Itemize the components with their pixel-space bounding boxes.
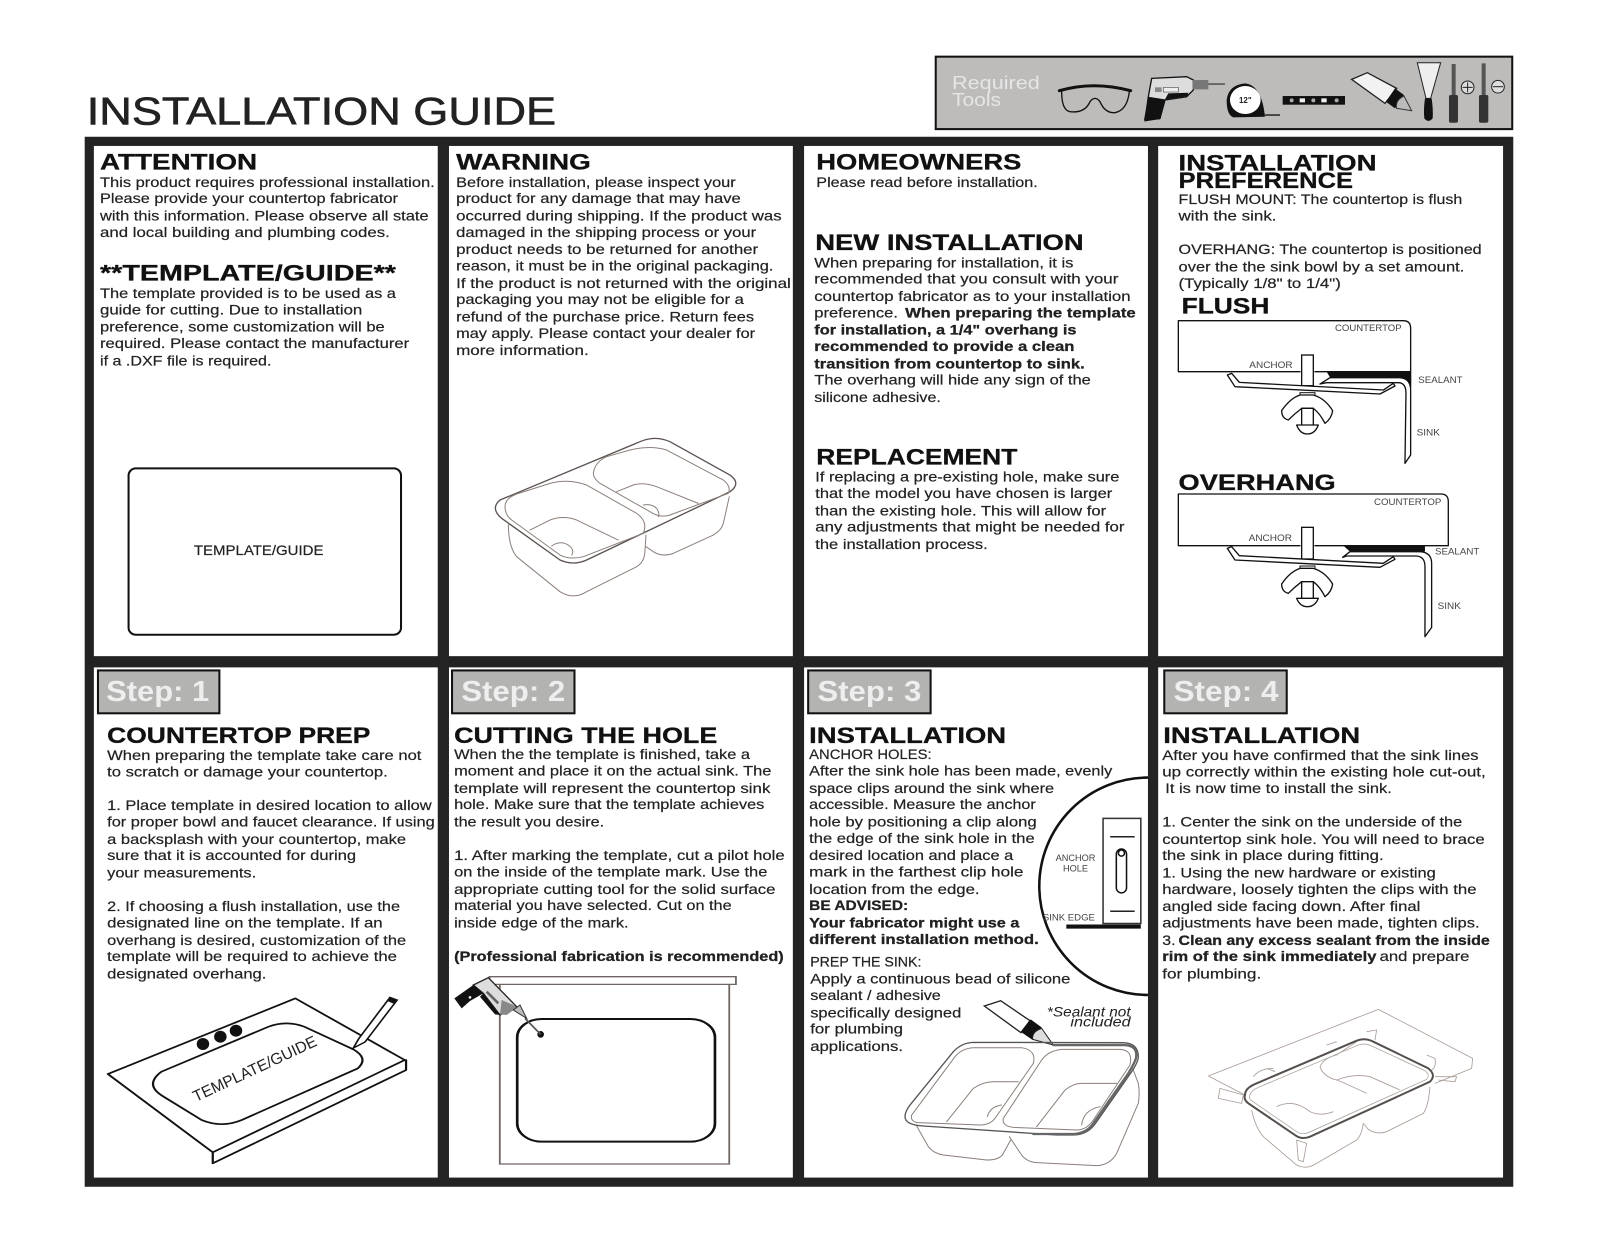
text: step 4 body: angled side facing down. After final (1162, 899, 1420, 915)
text: step 1 body: template will be required to achieve the (107, 949, 397, 965)
text: new installation body: preference. (814, 305, 898, 321)
text: warning body: refund of the purchase price. Return fees (456, 309, 754, 325)
text: anchor holes: Your fabricator might use a (809, 916, 1021, 932)
text: step 4 body: rim of the sink immediately (1162, 949, 1377, 965)
outer frame (85, 137, 1513, 1187)
text: warning body: product for any damage that may have (456, 191, 741, 207)
text: warning body: damaged in the shipping process or your (456, 225, 756, 241)
text: warning body: occurred during shipping. If the product was (456, 208, 782, 224)
icon: phillips screwdriver (1449, 64, 1474, 123)
heading: installation preference: PREFERENCE (1179, 168, 1353, 193)
diagram: overhang mount: SEALANT (1435, 546, 1480, 556)
text: prep the sink: specifically designed (810, 1005, 961, 1021)
diagram: overhang mount: ANCHOR (1249, 533, 1293, 543)
text: warning body: more information. (456, 343, 589, 359)
text: anchor holes: different installation method. (809, 932, 1039, 948)
detail: anchor hole circle: HOLE (1063, 863, 1088, 873)
diagram: flush mount: ANCHOR (1249, 360, 1293, 370)
detail: anchor hole circle: SINK EDGE (1043, 912, 1095, 922)
heading: replacement: REPLACEMENT (816, 444, 1018, 469)
text: new installation body: countertop fabricator as to your installation (814, 289, 1131, 305)
panel: attention (94, 146, 438, 656)
text: anchor holes: mark in the farthest clip hole (809, 865, 1024, 881)
text: attention body: and local building and plumbing codes. (100, 225, 390, 241)
illustration: double bowl sink (495, 438, 736, 596)
icon: drill (1144, 77, 1225, 121)
text: new installation body: When preparing for installation, it is (814, 255, 1073, 271)
illustration: sink with sealant tube (905, 1001, 1139, 1166)
text: step 4 body: countertop sink hole. You will need to brace (1162, 832, 1485, 848)
heading: warning: WARNING (456, 149, 591, 174)
text: new installation body: silicone adhesive. (814, 390, 941, 406)
text: step 2 body: on the inside of the template mark. Use the (454, 865, 767, 881)
text: attention body: with this information. Please observe all state (99, 208, 429, 224)
text: step 2 body: template will represent the countertop sink (454, 781, 771, 797)
required tools panel: Required (952, 72, 1040, 93)
text: anchor holes (809, 747, 1113, 948)
icon: sealant tube (1352, 73, 1412, 111)
diagram: flush mount: COUNTERTOP (1335, 323, 1402, 333)
text: new installation body: for installation, a 1/4" overhang is (814, 323, 1077, 339)
diagram: flush mount (1178, 321, 1463, 463)
text: preference body: FLUSH MOUNT: The countertop is flush (1179, 192, 1462, 208)
text: step 4 body: adjustments have been made, tighten clips. (1162, 916, 1480, 932)
note: sealant not included: *Sealant not (1047, 1004, 1132, 1019)
text: warning body: Before installation, please inspect your (456, 175, 736, 191)
badge: step 3 (808, 670, 931, 713)
text: step 1 body: When preparing the template take care not (107, 748, 421, 764)
icon: putty knife (1417, 63, 1441, 121)
text: anchor holes: ANCHOR HOLES: (809, 747, 932, 763)
text: step 1 body: a backsplash with your countertop, make (107, 832, 406, 848)
text: template guide body (100, 286, 409, 369)
text: anchor holes: location from the edge. (809, 882, 980, 898)
text: step 2 body: hole. Make sure that the template achieves (454, 797, 764, 813)
badge: step 3: Step: 3 (817, 676, 921, 708)
text: anchor holes: After the sink hole has been made, evenly (809, 764, 1113, 780)
text: prep the sink: applications. (810, 1039, 903, 1055)
text: preference body: over the the sink bowl by a set amount. (1179, 259, 1464, 275)
text: preference body: with the sink. (1177, 208, 1277, 224)
panel: step 3 (804, 667, 1148, 1178)
diagram: flush mount: SINK (1417, 427, 1440, 437)
text: step 1 body: 1. Place template in desired location to allow (107, 798, 432, 814)
panel: step 2 (449, 667, 793, 1178)
text: step 4 body (1162, 748, 1490, 983)
template box: TEMPLATE/GUIDE (194, 543, 323, 559)
text: step 2 body: material you have selected. Cut on the (454, 898, 732, 914)
text: warning body: reason, it must be in the original packaging. (456, 258, 773, 274)
text: warning body (456, 175, 791, 359)
icon: tape measure: 12" (1239, 96, 1252, 105)
diagram: overhang mount: SINK (1438, 601, 1461, 611)
heading: cutting the hole: CUTTING THE HOLE (454, 723, 717, 748)
text: step 4 body: for plumbing. (1162, 967, 1261, 983)
text: prep the sink: Apply a continuous bead of silicone (810, 972, 1070, 988)
text: new installation body: recommended that you consult with your (814, 272, 1119, 288)
text: step 1 body: your measurements. (107, 866, 256, 882)
template box (129, 468, 401, 635)
text: new installation body: transition from countertop to sink. (814, 356, 1085, 372)
text: step 4 body: up correctly within the existing hole cut-out, (1162, 765, 1486, 781)
text: new installation body: The overhang will hide any sign of the (814, 373, 1091, 389)
panel: step 1 (94, 667, 438, 1178)
diagram: overhang mount (1178, 494, 1480, 637)
text: replacement body: that the model you have chosen is larger (815, 486, 1113, 502)
text: new installation body (814, 255, 1136, 406)
text: step 1 body: designated line on the template. If an (107, 916, 383, 932)
text: step 4 body: 1. Using the new hardware or existing (1162, 866, 1436, 882)
text: replacement body: any adjustments that might be needed for (815, 520, 1125, 536)
text: prep the sink (810, 954, 1070, 1055)
icon: safety goggles (1059, 86, 1131, 113)
heading: installation: INSTALLATION (809, 723, 1006, 748)
text: attention body (99, 175, 435, 241)
text: step 1 body: to scratch or damage your countertop. (107, 765, 388, 781)
panel: step 4 (1158, 667, 1503, 1178)
text: prep the sink: for plumbing (810, 1022, 903, 1038)
heading: installation: INSTALLATION (1163, 723, 1360, 748)
text: step 2 body (454, 747, 785, 965)
text: homeowners intro: Please read before installation. (816, 175, 1038, 191)
text: step 2 body: appropriate cutting tool for the solid surface (454, 882, 776, 898)
text: replacement body: If replacing a pre-existing hole, make sure (815, 470, 1119, 486)
badge: step 2 (452, 670, 574, 713)
illustration: sink mounted under countertop (1208, 1009, 1473, 1167)
text: step 2 body: moment and place it on the actual sink. The (454, 764, 772, 780)
text: preference body: OVERHANG: The countertop is positioned (1179, 242, 1482, 258)
heading: overhang: OVERHANG (1179, 470, 1336, 495)
text: step 1 body: overhang is desired, customization of the (107, 933, 406, 949)
heading: installation preference: INSTALLATION (1179, 150, 1377, 175)
heading: homeowners: HOMEOWNERS (816, 149, 1021, 174)
text: anchor holes: space clips around the sink where (809, 781, 1054, 797)
text: step 4 body: 1. Center the sink on the underside of the (1162, 815, 1462, 831)
text: warning body: product needs to be returned for another (456, 242, 758, 258)
text: new installation body: When preparing the template (905, 305, 1136, 321)
text: step 2 body: (Professional fabrication is recommended) (454, 949, 784, 965)
text: step 1 body: sure that it is accounted for during (107, 848, 356, 864)
illustration: template on countertop (108, 997, 406, 1163)
text: replacement body: than the existing hole. This will allow for (815, 503, 1106, 519)
text: template guide body: The template provided is to be used as a (100, 286, 396, 302)
illustration: template on countertop: TEMPLATE/GUIDE (190, 1033, 320, 1106)
heading: flush: FLUSH (1182, 293, 1269, 318)
panel: homeowners (804, 146, 1148, 656)
text: step 2 body: the result you desire. (454, 815, 604, 831)
text: step 2 body: 1. After marking the template, cut a pilot hole (454, 848, 785, 864)
diagram: flush mount: SEALANT (1418, 375, 1463, 385)
required tools panel (936, 57, 1512, 129)
text: step 4 body: It is now time to install the sink. (1165, 781, 1392, 797)
badge: step 1: Step: 1 (106, 676, 209, 708)
text: prep the sink: sealant / adhesive (810, 988, 941, 1004)
text: replacement body (815, 470, 1125, 553)
icon: flat screwdriver (1479, 63, 1504, 123)
text: step 1 body: designated overhang. (107, 967, 266, 983)
text: step 1 body: 2. If choosing a flush installation, use the (107, 899, 400, 915)
panel: installation preference (1158, 146, 1503, 656)
text: anchor holes: hole by positioning a clip along (809, 815, 1037, 831)
badge: step 4 (1164, 670, 1287, 713)
heading: template guide: **TEMPLATE/GUIDE** (100, 261, 396, 286)
diagram: overhang mount: COUNTERTOP (1374, 497, 1441, 507)
badge: step 2: Step: 2 (461, 676, 565, 708)
heading: new installation: NEW INSTALLATION (815, 230, 1084, 255)
title: INSTALLATION GUIDE (87, 91, 556, 134)
text: step 4 body: After you have confirmed that the sink lines (1162, 748, 1479, 764)
heading: installation preference (1179, 150, 1377, 193)
text: step 4 body: Clean any excess sealant from the inside (1179, 933, 1490, 949)
text: step 2 body: inside edge of the mark. (454, 916, 629, 932)
text: template guide body: required. Please contact the manufacturer (100, 336, 409, 352)
text: replacement body: the installation process. (815, 537, 988, 553)
text: step 4 body: hardware, loosely tighten the clips with the (1162, 882, 1477, 898)
text: template guide body: preference, some customization will be (100, 320, 385, 336)
text: new installation body: recommended to provide a clean (814, 339, 1074, 355)
detail: anchor hole circle: ANCHOR (1056, 853, 1096, 863)
heading: countertop prep: COUNTERTOP PREP (107, 723, 370, 748)
panel: warning (449, 146, 793, 656)
text: step 4 body: the sink in place during fitting. (1162, 848, 1384, 864)
text: preference body: (Typically 1/8" to 1/4") (1179, 276, 1341, 292)
text: prep the sink: PREP THE SINK: (810, 954, 921, 970)
text: attention body: This product requires professional installation. (100, 175, 435, 191)
text: warning body: If the product is not returned with the original (456, 276, 791, 292)
text: anchor holes: desired location and place a (809, 848, 1013, 864)
note: sealant not included: included (1070, 1015, 1132, 1030)
text: step 4 body: 3. (1162, 933, 1176, 949)
required tools panel: Tools (952, 89, 1001, 110)
text: anchor holes: accessible. Measure the anchor (809, 797, 1036, 813)
text: step 4 body: and prepare (1380, 949, 1469, 965)
detail: anchor hole circle (1039, 778, 1148, 995)
badge: step 1 (98, 670, 219, 713)
text: attention body: Please provide your countertop fabricator (100, 191, 398, 207)
text: warning body: packaging you may not be eligible for a (456, 292, 744, 308)
icon: tape measure (1227, 83, 1280, 117)
text: template guide body: guide for cutting. Due to installation (100, 302, 362, 318)
text: anchor holes: BE ADVISED: (809, 898, 908, 914)
text: step 1 body: for proper bowl and faucet clearance. If using (107, 815, 435, 831)
illustration: cutting pilot hole (454, 977, 736, 1164)
note: sealant not included (1047, 1004, 1132, 1030)
text: preference body (1177, 192, 1482, 292)
text: template guide body: if a .DXF file is required. (100, 353, 271, 369)
heading: attention: ATTENTION (100, 149, 257, 174)
icon: level (1283, 96, 1345, 105)
text: step 1 body (107, 748, 435, 983)
text: warning body: may apply. Please contact your dealer for (456, 326, 755, 342)
badge: step 4: Step: 4 (1173, 676, 1279, 708)
text: step 2 body: When the the template is finished, take a (454, 747, 750, 763)
text: anchor holes: the edge of the sink hole in the (809, 831, 1035, 847)
